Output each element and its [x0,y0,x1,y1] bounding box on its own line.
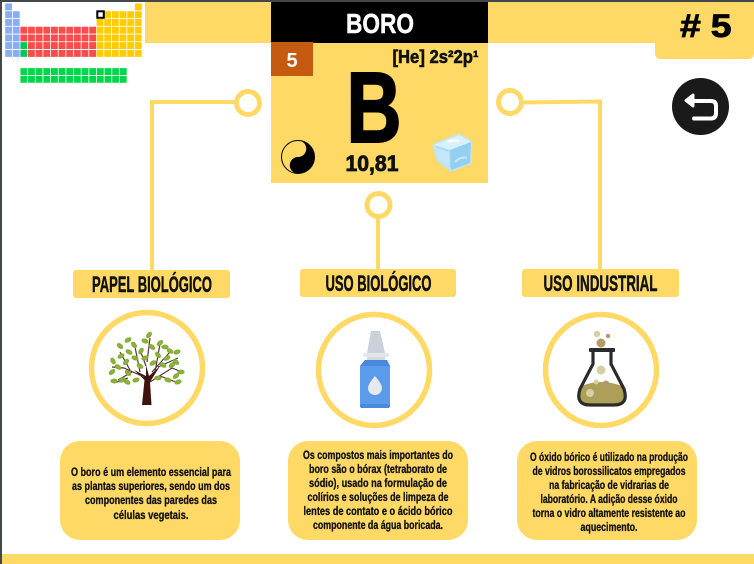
text card: uso industrial: torna o vidro altamente resistente ao [532,508,686,520]
icon: eye-drop bottle in ring [318,314,430,426]
text card: uso industrial: aquecimento. [580,522,638,534]
element symbol: B [346,52,402,164]
page number tab: # 5 [680,8,732,44]
heading: uso industrial: USO INDUSTRIAL [544,271,658,296]
element card [271,42,488,183]
page number tab [655,8,754,59]
text card: uso industrial: na fabricação de vidrarias de [549,480,669,492]
heading: papel biológico [73,270,230,298]
atomic number: 5 [286,50,298,72]
text card: uso biológico: sódio), usado na formulação de [309,478,447,490]
connector: left [152,92,260,270]
text card: papel biológico: células vegetais. [114,510,188,522]
text card: uso biológico [288,441,468,540]
periodic table icon [5,7,142,79]
text card: papel biológico: O boro é um elemento essencial para [71,467,231,479]
atomic number [271,42,313,76]
text card: uso industrial: laboratório. A adição desse óxido [540,494,678,506]
text card: uso biológico: componente da água boricada. [313,520,443,532]
text card: uso biológico: boro são o bórax (tetraborato de [309,464,447,476]
text card: papel biológico: as plantas superiores, sendo um dos [72,481,230,493]
heading: uso biológico [300,269,456,297]
connector: center [367,194,390,270]
heading: papel biológico: PAPEL BIOLÓGICO [92,272,212,297]
heading: uso industrial [522,269,679,297]
bottom yellow band [0,554,754,564]
text card: uso biológico: colírios e soluções de limpeza de [308,492,448,504]
icon: tree in ring [92,312,202,424]
top yellow band [145,0,754,43]
icon: flask in ring [546,314,656,426]
icon: yin yang [282,140,314,174]
back button [672,78,729,135]
text card: uso industrial: O óxido bórico é utilizado na produção [530,452,688,464]
electron configuration: [He] 2s²2p¹ [392,47,479,67]
text card: uso industrial [517,441,697,540]
connector: right [498,90,600,270]
text card: papel biológico: componentes das paredes das [85,495,217,507]
text card: uso industrial: de vidros borossilicatos empregados [532,466,686,478]
icon: ice cube [434,135,471,170]
text card: uso biológico: lentes de contato e o ácido bórico [304,506,452,518]
text card: papel biológico [60,441,240,540]
text card: uso biológico: Os compostos mais importantes do [303,450,453,462]
element header [271,2,488,43]
element header: BORO [346,8,414,39]
heading: uso biológico: USO BIOLÓGICO [326,271,432,296]
atomic mass: 10,81 [346,151,398,176]
